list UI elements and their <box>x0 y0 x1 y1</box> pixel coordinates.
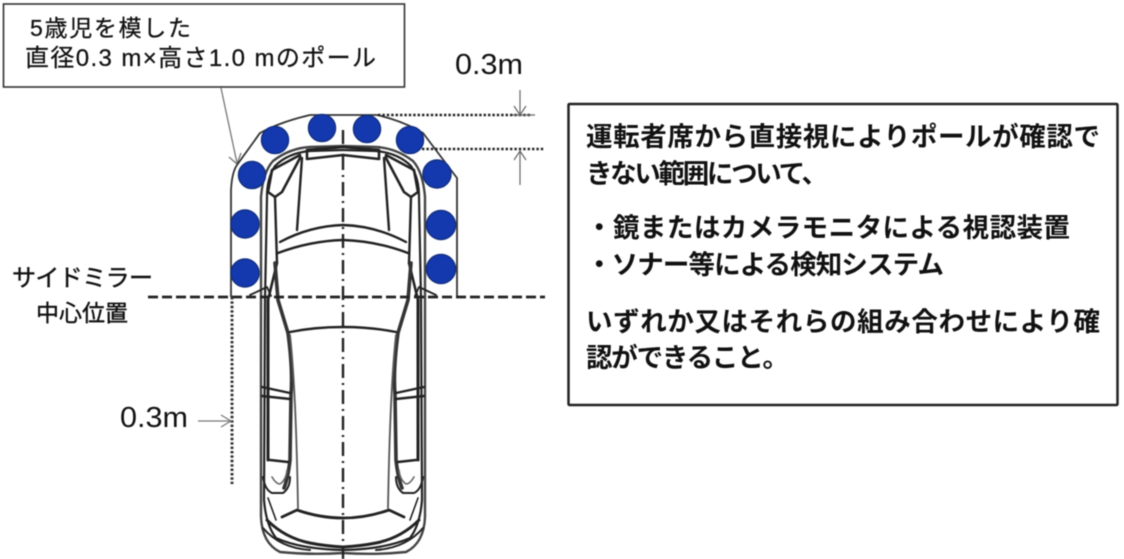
arrow: left clearance <box>198 415 231 427</box>
callout: pole description: 直径0.3 m×高さ1.0 mのポール <box>25 45 376 72</box>
panel: requirement text: 認ができること。 <box>586 343 789 373</box>
label: left 0.3m: 0.3m <box>120 402 188 434</box>
poles: blue circles <box>231 114 456 287</box>
side mirror centre line <box>148 296 545 298</box>
car centre line <box>342 130 344 559</box>
arrow: front clearance top <box>512 90 535 115</box>
callout: pole description <box>4 4 404 87</box>
callout: pole description: 5歳児を模した <box>30 15 191 41</box>
arrow: front clearance bottom <box>514 151 526 185</box>
panel: requirement text: ・鏡またはカメラモニタによる視認装置 <box>586 213 1070 243</box>
panel: requirement text <box>568 104 1118 405</box>
label: side mirror centre position: サイドミラー <box>12 265 153 292</box>
panel: requirement text: きない範囲について、 <box>586 159 828 189</box>
panel: requirement text: いずれか又はそれらの組み合わせにより確 <box>586 307 1100 337</box>
panel: requirement text: ・ソナー等による検知システム <box>586 250 944 280</box>
left clearance dotted line <box>230 297 234 484</box>
panel: requirement text: 運転者席から直接視によりポールが確認で <box>586 122 1100 152</box>
label: side mirror centre position <box>12 265 153 326</box>
pole zone outline <box>231 115 457 297</box>
label: top 0.3m: 0.3m <box>455 49 523 81</box>
car top view <box>250 146 436 554</box>
front clearance dotted lines <box>378 115 545 149</box>
arrow: callout leader to pole zone <box>221 88 241 164</box>
label: side mirror centre position: 中心位置 <box>36 300 128 326</box>
